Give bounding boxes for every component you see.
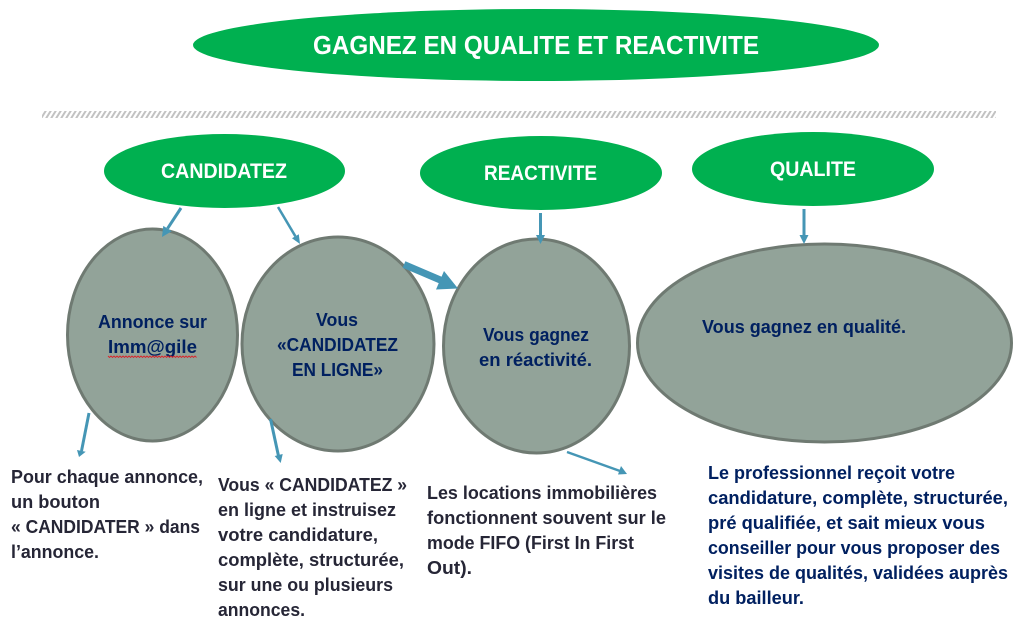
panel: vous gagnez en qualite (638, 244, 1012, 442)
arrow: en ligne to reactivite (404, 264, 458, 290)
arrow: qualite down (800, 209, 808, 244)
heading: reactivite: REACTIVITE (484, 162, 597, 185)
panel: vous gagnez en qualite: Vous gagnez en qualité. (702, 316, 906, 337)
text block: vous candidatez en ligne (218, 474, 407, 620)
panel: annonce sur immagile: Imm@gile (108, 336, 197, 357)
text block: le professionnel: visites de qualités, validées auprès (708, 562, 1008, 583)
heading: qualite: QUALITE (770, 158, 856, 181)
text block: locations immobilieres: fonctionnent souvent sur le (427, 507, 666, 528)
arrow: annonce to text (77, 413, 89, 457)
text block: le professionnel (708, 462, 1008, 608)
text block: le professionnel: candidature, complète, structurée, (708, 487, 1008, 508)
arrow: reactivite down (536, 213, 545, 244)
panel: annonce sur immagile (68, 229, 238, 441)
heading: qualite (692, 132, 934, 206)
panel: vous gagnez en reactivite: en réactivité. (479, 349, 592, 370)
panel: vous candidatez en ligne (242, 237, 434, 451)
text block: le professionnel: Le professionnel reçoit votre (708, 462, 955, 483)
text block: pour chaque annonce: Pour chaque annonce, (11, 466, 203, 487)
text block: locations immobilieres: mode FIFO (First In First (427, 532, 634, 553)
title: GAGNEZ EN QUALITE ET REACTIVITE (313, 30, 759, 60)
text block: vous candidatez en ligne: complète, structurée, (218, 549, 404, 570)
arrow: candidatez to annonce (162, 208, 181, 237)
text block: pour chaque annonce (11, 466, 203, 562)
panel: vous gagnez en reactivite (444, 239, 630, 453)
panel: vous candidatez en ligne: Vous (316, 309, 358, 330)
text block: vous candidatez en ligne: sur une ou plusieurs (218, 574, 393, 595)
panel: vous candidatez en ligne: EN LIGNE» (292, 359, 383, 380)
heading: candidatez: CANDIDATEZ (161, 160, 287, 183)
heading: reactivite (420, 136, 662, 210)
text block: pour chaque annonce: l’annonce. (11, 541, 99, 562)
text block: le professionnel: conseiller pour vous proposer des (708, 537, 1000, 558)
text block: locations immobilieres (427, 482, 666, 578)
text block: le professionnel: du bailleur. (708, 587, 804, 608)
text block: locations immobilieres: Out). (427, 557, 472, 578)
title (193, 9, 879, 81)
text block: vous candidatez en ligne: votre candidature, (218, 524, 378, 545)
arrow: candidatez to en ligne (278, 207, 300, 244)
panel: vous candidatez en ligne: «CANDIDATEZ (277, 334, 398, 355)
text block: le professionnel: pré qualifiée, et sait mieux vous (708, 512, 985, 533)
arrow: en ligne to text (270, 419, 283, 463)
text block: vous candidatez en ligne: annonces. (218, 599, 305, 620)
panel: annonce sur immagile: Annonce sur (98, 311, 207, 332)
heading: candidatez (104, 134, 345, 208)
arrow: reactivite to text (567, 452, 627, 474)
panel: vous gagnez en reactivite: Vous gagnez (483, 324, 589, 345)
text block: vous candidatez en ligne: Vous « CANDIDATEZ » (218, 474, 407, 495)
text block: pour chaque annonce: « CANDIDATER » dans (11, 516, 200, 537)
text block: pour chaque annonce: un bouton (11, 491, 100, 512)
text block: vous candidatez en ligne: en ligne et instruisez (218, 499, 396, 520)
text block: locations immobilieres: Les locations immobilières (427, 482, 657, 503)
